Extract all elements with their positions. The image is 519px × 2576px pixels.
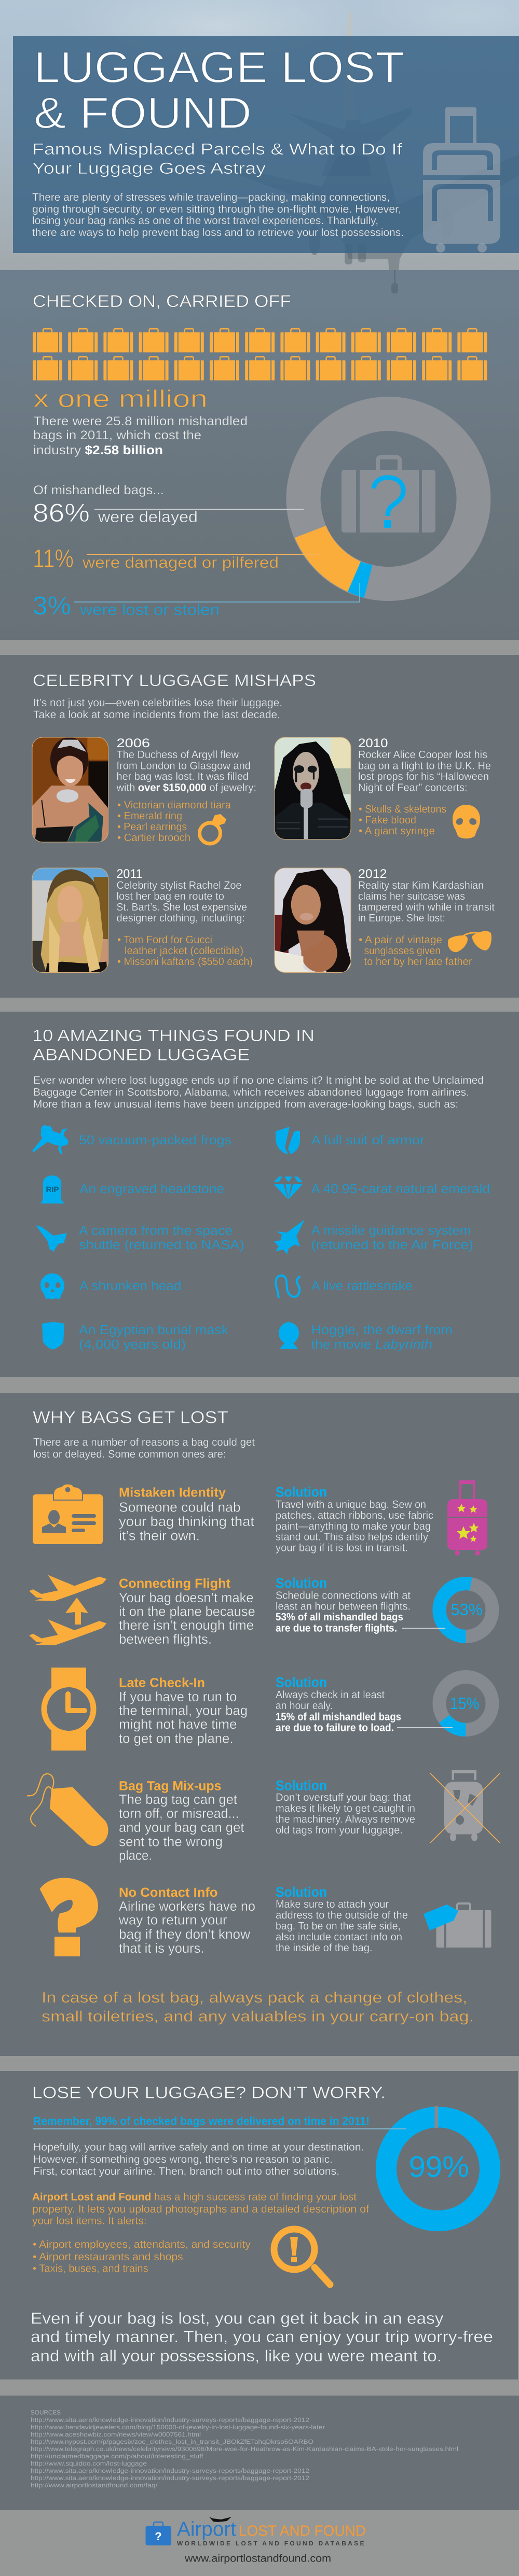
cause: no contact info: way to return your [118,1912,227,1928]
cause: connecting flight: Connecting Flight [119,1576,231,1591]
panel: celebrity luggage mishaps [0,655,519,998]
intro text: going through security, or even sitting through the on-flight movie. However, [32,203,401,215]
icon: blue suitcase logo: ? [155,2530,162,2543]
text: 2010: bag on a flight to the U.K. He [358,760,491,772]
intro: unclaimed baggage [33,1074,484,1110]
item: emerald [274,1177,490,1199]
item: headstone: An engraved headstone [79,1182,224,1196]
solution: connecting flight: 53% of all mishandled bags [276,1611,403,1623]
intro: unclaimed baggage: Ever wonder where lost luggage ends up if no one claims it? It might be sold at the Unclaimed [33,1074,484,1086]
solution: bag tag mix-ups: Solution [276,1777,327,1793]
item: missile guidance system [274,1220,473,1254]
icon: rolling suitcase [423,107,500,253]
text: 2006: 2006 [116,736,150,750]
footer logo: Airport Lost and Found: WORLDWIDE LOST AND FOUND DATABASE [177,2540,364,2547]
solution: mistaken identity: patches, attach ribbons, use fabric [276,1509,433,1521]
stat: 86% delayed [33,498,304,527]
text: 2012 [358,867,495,968]
text: 2006: with over $150,000 of jewelry: [116,782,256,793]
item: shrunken head [40,1273,182,1299]
text: 2006: • Victorian diamond tiara [117,799,231,811]
item: space shuttle camera: shuttle (returned to NASA) [79,1238,244,1252]
solution: mistaken identity: Solution [276,1484,327,1500]
airplane silhouette [199,11,519,293]
text: 2006: from London to Glasgow and [116,760,251,772]
text: 2012: claims her suitcase was [358,890,465,902]
donut: 99 percent: 99% [409,2150,469,2183]
donut: 53 percent [402,1584,492,1636]
subtitle [32,140,402,177]
text: 2010: 2010 [358,736,388,750]
stat text: bags in 2011, which cost the [33,428,201,442]
intro: celebrity: Take a look at some incidents from the last decade. [33,709,280,721]
solution: late check-in: an hour ealy. [276,1700,333,1712]
donut: 53 percent: 53% [450,1600,483,1619]
panel: sources: http://unclaimedbaggage.com/p/about/interesting_stuff [31,2453,203,2460]
icon: suitcase with question mark [342,457,435,533]
panel: sources: http://www.bendavidjewelers.com/blog/150000-of-jewelry-in-lost-luggage-found-six-years-later [31,2424,325,2431]
list: alerts: • Airport employees, attendants, and security [33,2238,251,2250]
cause: connecting flight: there isn’t enough time [119,1617,254,1633]
item: Hoggle [279,1322,453,1352]
stat: 11% damaged: were damaged or pilfered [82,554,279,571]
item: burial mask: (4,000 years old) [79,1337,186,1352]
text: 2010 [358,736,491,837]
donut: 15 percent [397,1677,492,1730]
intro: why bags: There are a number of reasons a bag could get [33,1436,255,1448]
heading: checked on: CHECKED ON, CARRIED OFF [33,291,291,311]
stat text [33,414,248,457]
text: 2010: • Fake blood [359,814,416,826]
cause: bag tag mix-ups: The bag tag can get [119,1791,238,1807]
solution: late check-in: Solution [276,1675,327,1690]
text: contact your airline [33,2141,364,2177]
solution: mistaken identity: Travel with a unique bag. Sew on [276,1499,426,1510]
item: rattlesnake: A live rattlesnake [311,1279,413,1293]
icon: connecting planes [29,1575,106,1645]
text: 2006: • Cartier brooch [117,832,190,844]
solution: no contact info: the inside of the bag. [276,1942,373,1954]
text: contact your airline: First, contact your airline. Then, branch out into other solutions. [33,2165,339,2177]
hero panel [13,36,519,253]
solution: mistaken identity: stand out. This also helps identify [276,1531,429,1543]
heading: lose your luggage: LOSE YOUR LUGGAGE? DON’T WORRY. [32,2083,386,2102]
text: 2006: • Pearl earrings [117,821,187,833]
item: armor: A full suit of armor [311,1133,425,1147]
stat: 11% damaged: 11% [33,544,74,573]
cause: bag tag mix-ups: Bag Tag Mix-ups [119,1779,221,1793]
solution: no contact info: Solution [276,1884,327,1900]
solution: mistaken identity [276,1484,433,1553]
item: space shuttle camera [36,1224,244,1252]
icon: watch [44,1668,93,1751]
panel: sources [0,2396,519,2510]
cause: connecting flight: it on the plane because [119,1603,255,1619]
text: 2011: designer clothing, including: [116,912,245,924]
website url: www.airportlostandfound.com [184,2553,331,2565]
donut: 99 percent [386,2106,490,2221]
subtitle: Your Luggage Goes Astray [32,159,266,177]
cause: late check-in: If you have to run to [119,1689,237,1704]
intro: celebrity: It’s not just you—even celebrities lose their luggage. [33,697,282,709]
solution: mistaken identity: paint—anything to make your bag [276,1520,431,1532]
intro text: There are plenty of stresses while traveling—packing, making connections, [32,191,390,203]
intro: why bags: lost or delayed. Some common ones are: [33,1448,226,1460]
panel: sources: http://www.aceshowbiz.com/news/view/w0007561.html [31,2431,201,2438]
icon: crossed-out suitcase [430,1770,500,1843]
cause: no contact info: that it is yours. [119,1940,204,1956]
item: Hoggle: Hoggle, the dwarf from [311,1323,453,1337]
cause: no contact info: bag if they don’t know [119,1926,250,1942]
text: airport lost and found: property. It lets you upload photographs and a detailed description of [32,2203,369,2215]
closing statement [31,2309,493,2365]
cause: mistaken identity [119,1485,255,1543]
cause: late check-in [119,1676,248,1746]
text: contact your airline: Hopefully, your bag will arrive safely and on time at your destination. [33,2141,364,2153]
cause: mistaken identity: your bag thinking that [119,1514,255,1529]
text: 2006: • Emerald ring [117,810,182,822]
panel: sources: http://www.telegraph.co.uk/news/celebritynews/9300696/More-woe-for-Heathrow-as-Kim-Kardashian-claims-BA-stole-her-sunglasses.html [31,2445,458,2453]
solution: bag tag mix-ups [276,1777,415,1836]
heading: celebrity: CELEBRITY LUGGAGE MISHAPS [33,671,316,690]
solution: no contact info [276,1884,408,1954]
closing statement: Even if your bag is lost, you can get it back in an easy [31,2309,444,2327]
intro: unclaimed baggage: Baggage Center in Scottsboro, Alabama, which receives abandoned luggage from airlines. [33,1086,469,1098]
item: Hoggle: the movie Labyrinth [311,1337,432,1352]
subtitle: Famous Misplaced Parcels & What to Do If [32,140,402,158]
stat: 3% lost: 3% [33,591,71,620]
solution: late check-in: Always check in at least [276,1689,385,1701]
panel: checked on, carried off [0,270,519,640]
icon: bag tag [27,1774,108,1846]
text: airport lost and found [32,2191,369,2227]
cause: bag tag mix-ups: place. [119,1847,152,1863]
stat: 3% lost: were lost or stolen [79,601,220,619]
solution: bag tag mix-ups: makes it likely to get caught in [276,1802,415,1814]
stat: 11% damaged [33,544,320,573]
stat lines: Of mishandled bags... [33,483,164,497]
footer logo: Airport Lost and Found: LOST AND FOUND [239,2523,366,2540]
text: 2012: sunglasses given [364,945,441,957]
solution: no contact info: bag. To be on the safe side, [276,1920,401,1932]
cause: late check-in: might not have time [119,1716,237,1732]
cause: connecting flight: Your bag doesn’t make [119,1590,253,1605]
photo: Duchess of Argyll [32,737,108,842]
icon: diamond ring [199,814,226,844]
panel: why bags get lost [0,1393,519,2056]
solution: bag tag mix-ups: old tags from your luggage. [276,1824,403,1836]
text: 2011: Celebrity stylist Rachel Zoe [116,879,242,891]
list: alerts: • Airport restaurants and shops [33,2251,183,2263]
item: burial mask [42,1322,229,1352]
stat: 3% lost [33,583,360,620]
list: alerts [33,2238,251,2274]
solution: no contact info: Make sure to attach your [276,1898,389,1910]
cause: mistaken identity: Someone could nab [119,1500,241,1515]
text: 2011: leather jacket (collectible) [125,945,243,957]
cause: connecting flight [119,1576,255,1647]
solution: connecting flight: least an hour between flights. [276,1600,411,1613]
text: 2010: Night of Fear” concerts: [358,782,467,793]
cause: late check-in: the terminal, your bag [119,1703,248,1718]
solution: no contact info: also include contact info on [276,1931,402,1943]
icon: blue suitcase logo [145,2522,171,2545]
airplane landing gear reflection [391,270,398,293]
icon: sunglasses [448,931,491,952]
callout: carry-on tip: In case of a lost bag, always pack a change of clothes, [42,1990,467,2006]
panel: sources: http://www.airportlostandfound.com/faq/ [31,2482,158,2489]
callout: carry-on tip [42,1990,474,2025]
panel: lose your luggage [0,2071,518,2379]
photo: Kim Kardashian [274,865,352,975]
solution: connecting flight: are due to transfer flights. [276,1622,397,1634]
item: headstone: RIP [46,1185,59,1194]
intro text: there are ways to help prevent bag loss and to retrieve your lost possessions. [32,227,404,239]
solution: connecting flight: Schedule connections with at [276,1590,411,1601]
panel: sources: SOURCES [31,2409,61,2416]
icon: skull [453,805,480,838]
callout: 99 percent delivered: Remember, 99% of checked bags were delivered on time in 2011! [33,2115,370,2127]
stat text: There were 25.8 million mishandled [33,414,248,428]
item: rattlesnake [276,1276,413,1298]
text: 2010: • A giant syringe [359,825,435,837]
solution: late check-in: 15% of all mishandled bags [276,1711,401,1723]
item: emerald: A 40.95-carat natural emerald [311,1182,490,1196]
item: frogs [32,1125,231,1154]
icon: suitcase with address tag [424,1903,491,1948]
solution: connecting flight [276,1575,411,1634]
intro text [32,191,404,239]
footer logo: Airport Lost and Found [145,2517,366,2565]
cause: no contact info: Airline workers have no [119,1898,255,1914]
cause: mistaken identity: it’s their own. [119,1528,200,1543]
item: burial mask: An Egyptian burial mask [79,1323,229,1337]
icon row: suitcases [33,329,487,381]
donut: 15 percent: 15% [450,1694,480,1713]
text: 2011: 2011 [116,867,142,881]
text: 2012: tampered with while in transit [358,901,495,913]
intro: celebrity [33,697,282,721]
title: LUGGAGE LOST [34,43,404,92]
text: 2012: to her by her late father [364,956,472,968]
stat: 86% delayed: were delayed [98,509,198,526]
solution: late check-in [276,1675,401,1734]
cause: late check-in: Late Check-In [119,1676,205,1690]
text: 2010: Rocker Alice Cooper lost his [358,749,487,761]
cause: bag tag mix-ups [119,1779,244,1863]
solution: bag tag mix-ups: the machinery. Always remove [276,1813,415,1825]
text: 2006: The Duchess of Argyll flew [116,749,239,761]
closing statement: and timely manner. Then, you can enjoy your trip worry-free [31,2328,493,2346]
hero background: sky with airplane [0,0,519,293]
panel: sources: http://www.sita.aero/knowledge-innovation/industry-surveys-reports/baggage-report-2012 [31,2474,309,2482]
item: headstone [40,1175,224,1203]
heading: 10 amazing things [32,1026,315,1064]
heading: 10 amazing things: 10 AMAZING THINGS FOUND IN [32,1026,315,1045]
cause: no contact info: No Contact Info [119,1885,218,1900]
callout: carry-on tip: small toiletries, and any valuables in your carry-on bag. [42,2009,474,2025]
photo: Rachel Zoe [32,868,108,973]
icon: ID badge [33,1484,103,1544]
photo: Alice Cooper [274,734,352,844]
panel: sources: http://www.sita.aero/knowledge-innovation/industry-surveys-reports/baggage-report-2012 [31,2467,309,2474]
intro text: losing your bag ranks as one of the worst travel experiences. Thankfully, [32,215,378,227]
text: 2010: • Skulls & skeletons [359,803,446,815]
title: & FOUND [34,89,252,138]
text: 2012: 2012 [358,867,387,881]
intro: why bags [33,1436,255,1460]
intro: unclaimed baggage: More than a few unusual items have been unzipped from average-looking bags, such as: [33,1098,458,1110]
text: 2006: her bag was lost. It was filled [116,771,249,782]
text: 2011: • Tom Ford for Gucci [117,934,212,946]
solution: bag tag mix-ups: Don’t overstuff your bag; that [276,1791,411,1803]
closing statement: and with all your possessions, like you were meant to. [31,2347,442,2365]
cause: bag tag mix-ups: sent to the wrong [119,1833,223,1849]
title [34,43,404,138]
item: frogs: 50 vacuum-packed frogs [79,1133,231,1147]
heading: 10 amazing things: ABANDONED LUGGAGE [33,1045,250,1064]
cause: mistaken identity: Mistaken Identity [119,1485,226,1500]
cause: bag tag mix-ups: and your bag can get [119,1819,244,1835]
solution: late check-in: are due to failure to load. [276,1721,394,1734]
text: 2011: St. Bart’s. She lost expensive [116,901,247,913]
solution: mistaken identity: your bag if it is lost in transit. [276,1542,408,1553]
panel: sources: http://www.sita.aero/knowledge-innovation/industry-surveys-reports/baggage-report-2012 [31,2416,309,2424]
heading: why bags get lost: WHY BAGS GET LOST [33,1407,228,1427]
text: 2012: Reality star Kim Kardashian [358,879,484,891]
panel: sources: http://www.nypost.com/p/pagesix/zoe_clothes_lost_in_transit_JBOkZfETahqDkrso5OARBO [31,2438,313,2445]
cause: bag tag mix-ups: torn off, or misread... [119,1805,239,1821]
cause: no contact info [118,1885,255,1956]
text: airport lost and found: Airport Lost and Found has a high success rate of finding your lost [32,2191,357,2203]
multiplier label: x one million [33,385,208,412]
item: missile guidance system: A missile guidance system [311,1223,471,1238]
icon: magnifying glass [274,2229,330,2285]
icon: small black plane [209,2517,231,2522]
text: 2011: lost her bag en route to [116,890,224,902]
cause: connecting flight: between flights. [119,1631,212,1647]
list: alerts: • Taxis, buses, and trains [33,2263,148,2274]
item: shrunken head: A shrunken head [79,1279,182,1293]
cause: late check-in: to get on the plane. [119,1731,234,1746]
text: contact your airline: However, if something goes wrong, there’s no reason to panic. [33,2153,333,2165]
stat: 86% delayed: 86% [33,498,90,527]
solution: connecting flight: Solution [276,1575,327,1591]
donut chart [286,397,490,601]
text: 2011 [116,867,253,968]
footer logo: Airport Lost and Found: Airport [177,2518,236,2541]
icon: question mark [39,1878,98,1956]
item: missile guidance system: (returned to the Air Force) [311,1238,473,1252]
text: 2011: • Missoni kaftans ($550 each) [117,956,253,968]
stat text: industry $2.58 billion [33,443,163,457]
solution: no contact info: address to the outside of the [276,1909,408,1921]
text: 2012: • A pair of vintage [359,934,442,946]
stat lines [33,483,360,620]
panel: 10 amazing things [0,1012,519,1377]
text: 2006 [116,736,256,844]
panel: sources: http://www.squidoo.com/lost-luggage [31,2460,147,2467]
item: space shuttle camera: A camera from the space [79,1224,233,1238]
icon: decorated pink suitcase [447,1480,487,1556]
text: airport lost and found: your lost items. It alerts: [32,2215,146,2227]
item: armor [276,1127,425,1154]
text: 2010: lost props for his “Halloween [358,771,489,782]
text: 2012: in Europe. She lost: [358,912,445,924]
